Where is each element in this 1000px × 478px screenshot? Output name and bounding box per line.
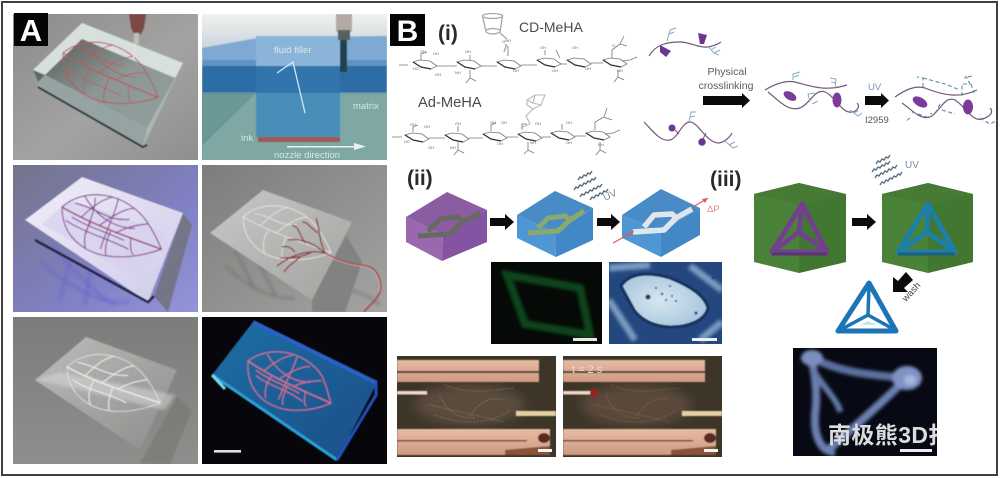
cube: blue with open white channel bbox=[622, 189, 700, 257]
time stamp: t = 2 s bbox=[572, 364, 603, 376]
chemical structure: CD-MeHA chain: OH bbox=[552, 68, 558, 73]
scale bar bbox=[538, 449, 552, 452]
cube: purple with printed channel bbox=[406, 192, 487, 261]
photo 2: cross-section schematic bbox=[202, 14, 387, 161]
chemical structure: Ad-MeHA chain: NH bbox=[598, 142, 604, 147]
tetrahedron: washed blue construct bbox=[838, 283, 896, 331]
chemical structure: CD-MeHA chain bbox=[399, 36, 637, 83]
covalently crosslinked network cartoon bbox=[895, 76, 998, 124]
icon: cyclodextrin cup bbox=[482, 14, 507, 52]
chemical structure: CD-MeHA chain: OH bbox=[585, 66, 591, 71]
chemical structure: Ad-MeHA chain: OH bbox=[410, 122, 416, 127]
nozzle direction arrow bbox=[287, 143, 366, 150]
cube: green with blue tetrahedron bbox=[882, 183, 973, 273]
chemical structure: CD-MeHA chain: OH bbox=[540, 45, 546, 50]
micrograph: printed tetrahedron bbox=[793, 348, 937, 456]
chemical structure: Ad-MeHA chain: OH bbox=[566, 120, 572, 125]
scale bar bbox=[900, 449, 932, 452]
heading (iii): (iii) bbox=[710, 168, 742, 191]
chemical structure: Ad-MeHA chain: OH bbox=[428, 145, 434, 150]
schematic labels: fluid filler bbox=[274, 45, 312, 56]
label: UV: UV bbox=[868, 82, 882, 93]
photo 6: fluorescent leaf in blue gel on black bbox=[202, 317, 387, 464]
chemical structure: CD-MeHA chain: NH bbox=[455, 70, 461, 75]
chemical structure: Ad-MeHA chain: OH bbox=[535, 121, 541, 126]
chemical structure: CD-MeHA chain: NH bbox=[505, 38, 511, 43]
label: UV (ii): UV bbox=[602, 188, 619, 204]
scale bar bbox=[573, 338, 597, 341]
chemical structure: Ad-MeHA chain bbox=[392, 108, 620, 155]
photo 5: white channels after removal bbox=[13, 317, 198, 464]
icon: adamantane cage bbox=[522, 95, 545, 127]
arrow: step to UV cured cube bbox=[852, 214, 876, 230]
chemical structure: CD-MeHA chain: OH bbox=[572, 45, 578, 50]
strand: CD-MeHA cartoon bbox=[649, 28, 721, 57]
schematic labels: nozzle direction bbox=[274, 150, 340, 161]
arrow: UV cure bbox=[865, 93, 889, 108]
label: physical crosslinking bbox=[699, 66, 754, 92]
watermark: 南极熊3D打印 bbox=[828, 422, 975, 448]
schematic labels: matrix bbox=[353, 101, 379, 112]
chemical structure: Ad-MeHA chain: NH bbox=[530, 140, 536, 145]
chemical structure: Ad-MeHA chain: OH bbox=[501, 120, 507, 125]
icon: UV rays bbox=[574, 171, 608, 200]
video frame: after dye injection at t = 2 s bbox=[563, 356, 722, 457]
label: I2959: I2959 bbox=[865, 115, 889, 126]
label A bbox=[14, 13, 48, 48]
schematic labels bbox=[241, 45, 379, 161]
chemical structure: CD-MeHA chain: NH bbox=[617, 68, 623, 73]
photo 3: illuminated leaf network bbox=[13, 165, 198, 312]
arrow: pressure bbox=[613, 198, 708, 243]
label B: B bbox=[397, 15, 418, 48]
cube: blue with green channel bbox=[517, 191, 593, 257]
callout lines: fluid filler bbox=[277, 62, 305, 113]
chemical structure: CD-MeHA chain: OH bbox=[433, 51, 439, 56]
chemical structure: Ad-MeHA chain: OH bbox=[455, 121, 461, 126]
chemical structure: CD-MeHA chain: OH bbox=[420, 49, 426, 54]
micrograph: blue bright-field channel bbox=[609, 262, 722, 344]
chemical structure: Ad-MeHA chain: OH bbox=[497, 141, 503, 146]
chemical structure: Ad-MeHA chain: OH bbox=[566, 140, 572, 145]
chemical structure: CD-MeHA chain: OH bbox=[435, 72, 441, 77]
chemical structure: CD-MeHA chain: OH bbox=[513, 68, 519, 73]
chemical structure: Ad-MeHA chain: OH bbox=[424, 124, 430, 129]
chemical structure: CD-MeHA chain: O bbox=[502, 39, 505, 44]
photo 1: nozzle printing leaf in clear gel bbox=[13, 14, 198, 160]
label: delta P: ΔP bbox=[707, 204, 720, 215]
panel B: guest-host hydrogels bbox=[390, 14, 998, 457]
cube: green with purple tetrahedron bbox=[754, 183, 846, 273]
label: physical crosslinking: Physical bbox=[707, 66, 747, 78]
chemical structure: CD-MeHA chain: O bbox=[612, 43, 615, 48]
scale bar bbox=[704, 449, 718, 452]
scale bar bbox=[692, 338, 717, 341]
chemical structure: Ad-MeHA chain: HO bbox=[404, 139, 410, 144]
label B bbox=[390, 14, 425, 48]
chemical structure: CD-MeHA chain: OH bbox=[465, 49, 471, 54]
micrograph: green fluorescent channel bbox=[491, 262, 602, 344]
label: wash: wash bbox=[899, 280, 923, 305]
arrow: step 1 bbox=[490, 214, 514, 230]
arrow: to crosslinked network bbox=[703, 93, 750, 108]
chemical structure: Ad-MeHA chain: NH bbox=[450, 145, 456, 150]
crosslinked network cartoon bbox=[765, 72, 862, 116]
label CD-MeHA: CD-MeHA bbox=[519, 19, 583, 35]
label A: A bbox=[20, 13, 42, 48]
chemical structure: Ad-MeHA chain: OH bbox=[490, 120, 496, 125]
panel A: leaf vascular network printing bbox=[13, 13, 387, 464]
chemical structure: CD-MeHA chain: HO bbox=[413, 66, 419, 71]
heading (ii): (ii) bbox=[407, 167, 433, 190]
arrow: wash bbox=[893, 272, 913, 292]
scale bar bbox=[214, 450, 241, 453]
label: UV (iii): UV bbox=[905, 160, 919, 171]
arrow: step 2 bbox=[597, 214, 620, 230]
label Ad-MeHA: Ad-MeHA bbox=[418, 95, 482, 111]
icon: UV rays (iii) bbox=[872, 155, 902, 185]
strand: Ad-MeHA cartoon bbox=[644, 112, 738, 148]
photo 4: partial perfusion of network bbox=[202, 165, 387, 312]
label: physical crosslinking: crosslinking bbox=[699, 80, 754, 92]
video frame: before dye injection bbox=[397, 356, 556, 457]
schematic labels: ink bbox=[241, 133, 253, 144]
heading (i): (i) bbox=[438, 22, 458, 45]
